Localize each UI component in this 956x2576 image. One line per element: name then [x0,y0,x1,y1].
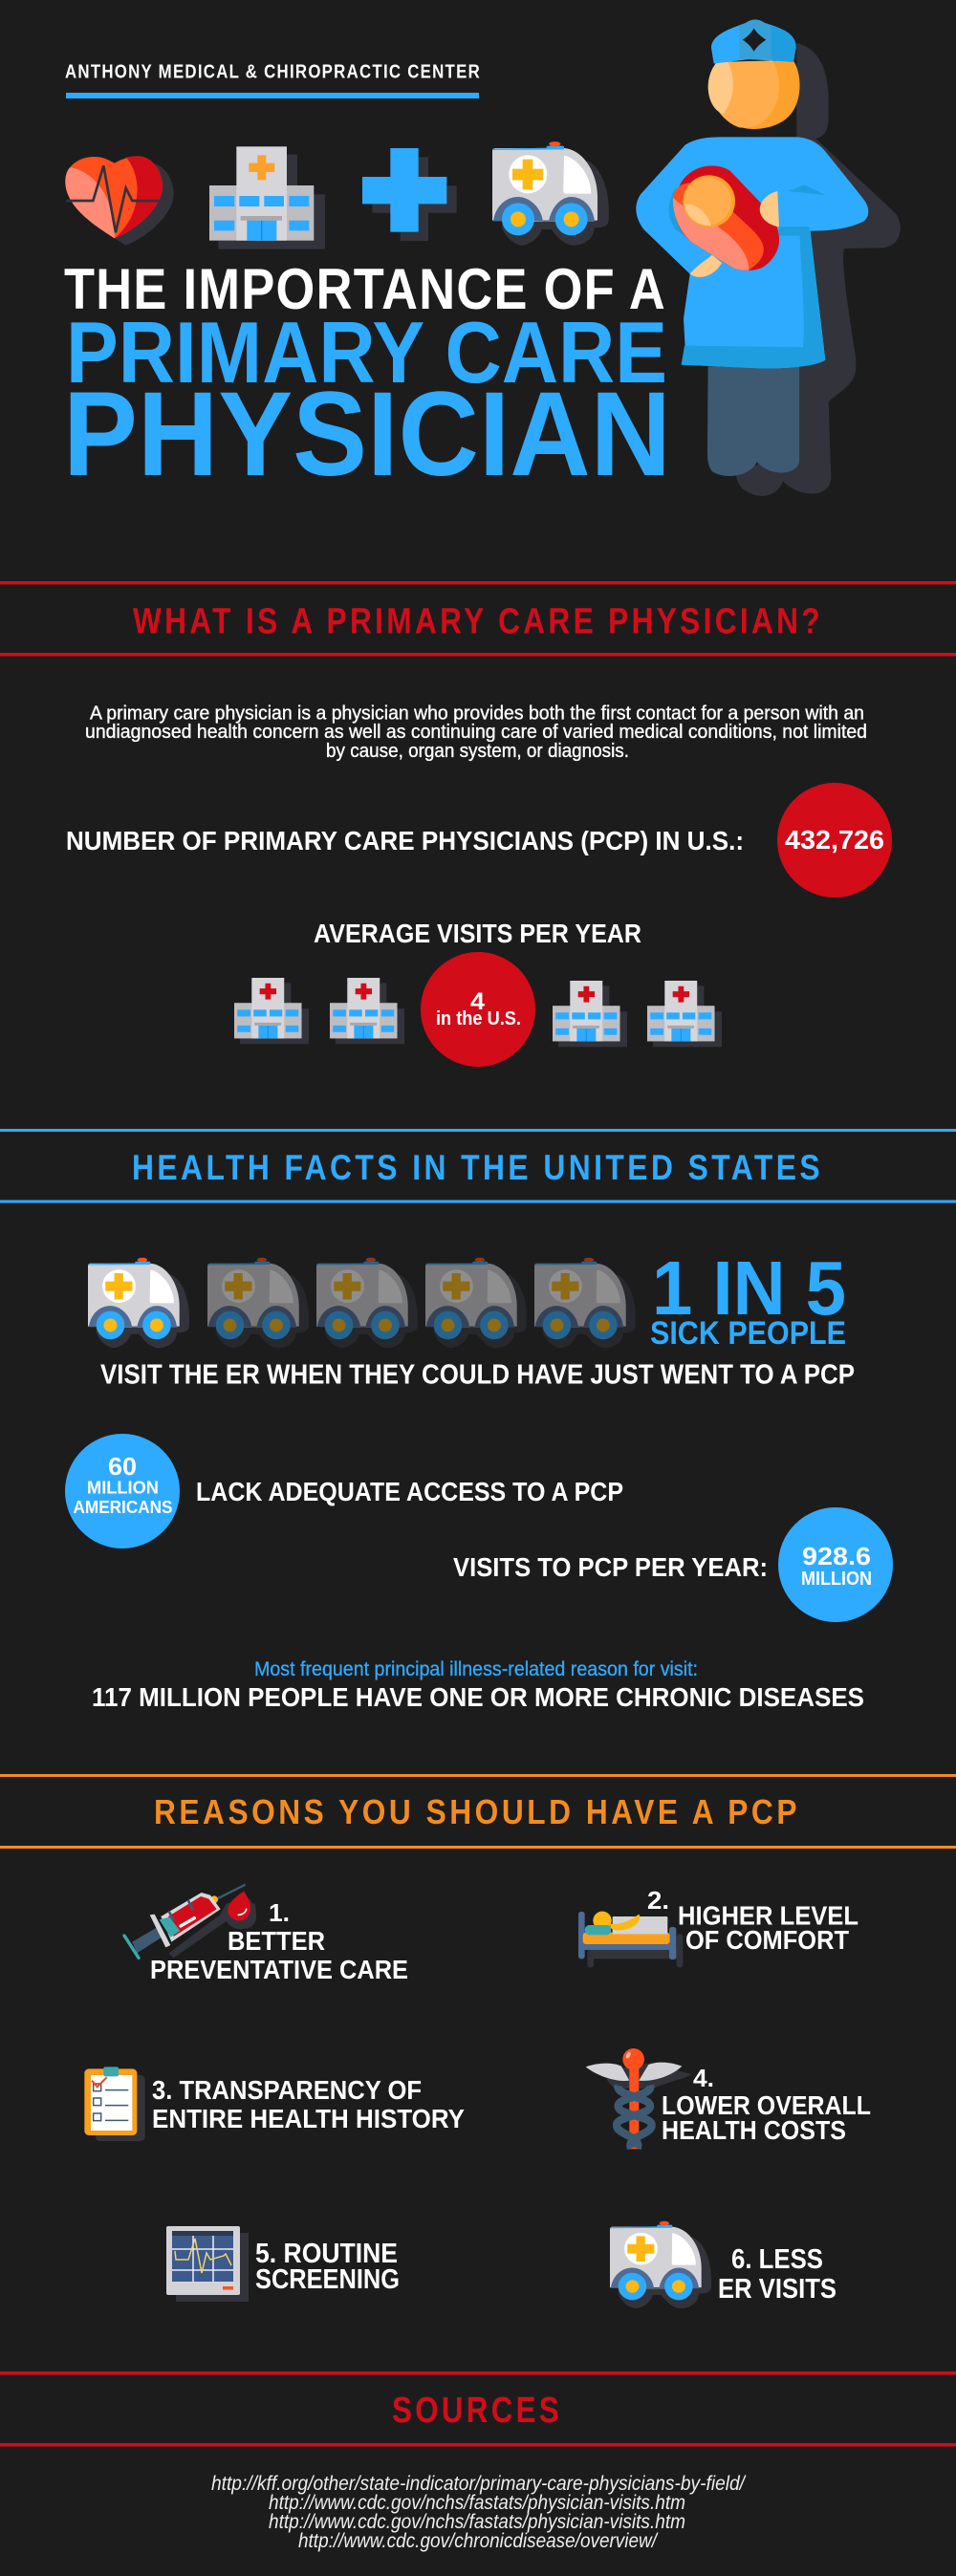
reason 4 [586,2048,871,2149]
stat: 1 in 5: 1 IN 5 [652,1245,846,1331]
organisation name: ANTHONY MEDICAL & CHIROPRACTIC CENTER [65,61,481,82]
reason 2 [578,1886,858,1967]
icon: heart monitor [166,2226,249,2302]
reason 4: 4. [693,2064,714,2092]
stat: number of PCPs: 432,726 [785,825,884,855]
section heading: SOURCES [392,2391,562,2431]
stat: visits per year: MILLION [801,1569,872,1590]
definition text [85,704,867,762]
reason 3 [84,2067,465,2141]
reason 6: ER VISITS [718,2274,836,2305]
chronic disease note: Most frequent principal illness-related reason for visit: [254,1658,698,1680]
definition text: A primary care physician is a physician who provides both the first contact for a person with an [90,704,864,725]
source list: http://www.cdc.gov/nchs/fastats/physician-visits.htm [269,2492,685,2514]
section rule top [0,581,956,585]
stat: number of PCPs: NUMBER OF PRIMARY CARE PHYSICIANS (PCP) IN U.S.: [66,826,744,855]
panel: reasons [0,1774,956,2308]
stat: average visits per year [234,919,722,1067]
definition text: undiagnosed health concern as well as continuing care of varied medical conditions, not limited [85,722,867,743]
title [63,257,671,501]
reason 2: HIGHER LEVEL [678,1900,858,1931]
stat: average visits per year: AVERAGE VISITS PER YEAR [314,919,641,948]
stat: 1 in 5: SICK PEOPLE [650,1315,846,1352]
reason 2: 2. [647,1886,669,1915]
title: PRIMARY CARE [66,305,667,401]
icon row: hospitals [234,978,722,1047]
source list: http://www.cdc.gov/chronicdisease/overview/ [298,2530,659,2552]
section rule top [0,1774,956,1777]
stat: visits per year: 928.6 [802,1542,871,1570]
chronic disease note [92,1658,864,1712]
stat: average visits per year: 4 [470,988,485,1015]
section rule top [0,2371,956,2374]
icon row: ambulances one in five [88,1258,636,1348]
reason 3: 3. TRANSPARENCY OF [152,2075,422,2105]
reason 6 [610,2221,836,2308]
panel: health facts [0,1129,956,1712]
icon: hospital bed [578,1912,683,1967]
reason 4: LOWER OVERALL [662,2090,871,2120]
icon: ambulance [492,141,609,246]
reason 4: HEALTH COSTS [662,2115,846,2145]
stat: 60 million: 60 [108,1452,137,1481]
stat: 60 million: MILLION [87,1478,159,1497]
section rule bottom [0,1846,956,1849]
icon: hospital [209,146,325,249]
stat: visits per year [453,1507,893,1622]
icon: heart [65,156,174,246]
reason 1: PREVENTATIVE CARE [150,1955,408,1984]
reason 6: 6. LESS [731,2244,823,2275]
reason 5 [166,2226,400,2302]
stat: number of PCPs [66,783,892,898]
illustration: doctor holding baby [636,19,901,496]
source list: http://kff.org/other/state-indicator/primary-care-physicians-by-field/ [211,2473,747,2495]
title: PHYSICIAN [63,368,671,501]
reason 1 [124,1885,408,1984]
ER visit caption: VISIT THE ER WHEN THEY COULD HAVE JUST WENT TO A PCP [100,1359,855,1390]
stat: 60 million: LACK ADEQUATE ACCESS TO A PCP [196,1477,623,1506]
reason 5: SCREENING [255,2264,400,2295]
stat: 60 million [65,1434,623,1548]
header underline [66,93,479,98]
icon: ambulance [610,2221,711,2308]
section heading: HEALTH FACTS IN THE UNITED STATES [132,1148,823,1187]
section rule bottom [0,1201,956,1202]
reason 2: OF COMFORT [685,1925,849,1955]
source list: http://www.cdc.gov/nchs/fastats/physician-visits.htm [269,2511,685,2533]
stat: average visits per year: in the U.S. [436,1008,521,1029]
reason 1: 1. [269,1898,290,1927]
icon: clipboard [84,2067,145,2141]
definition text: by cause, organ system, or diagnosis. [326,741,629,762]
reason 3: ENTIRE HEALTH HISTORY [152,2104,465,2133]
panel: header [63,19,901,501]
panel: what is a primary care physician [0,581,956,1067]
section heading: REASONS YOU SHOULD HAVE A PCP [154,1792,800,1831]
icon: medical cross [362,148,457,241]
reason 1: BETTER [228,1926,325,1956]
title: THE IMPORTANCE OF A [64,257,666,321]
panel: sources [0,2371,956,2552]
section rule bottom [0,653,956,656]
source list [211,2473,747,2552]
stat: visits per year: VISITS TO PCP PER YEAR: [453,1552,768,1582]
reason 5: 5. ROUTINE [255,2239,398,2269]
section rule bottom [0,2443,956,2447]
section rule top [0,1129,956,1132]
chronic disease note: 117 MILLION PEOPLE HAVE ONE OR MORE CHRONIC DISEASES [92,1682,864,1712]
icon: caduceus [586,2048,691,2149]
icon: syringe [124,1885,256,1958]
section heading: WHAT IS A PRIMARY CARE PHYSICIAN? [133,602,823,642]
stat: 60 million: AMERICANS [73,1498,172,1517]
